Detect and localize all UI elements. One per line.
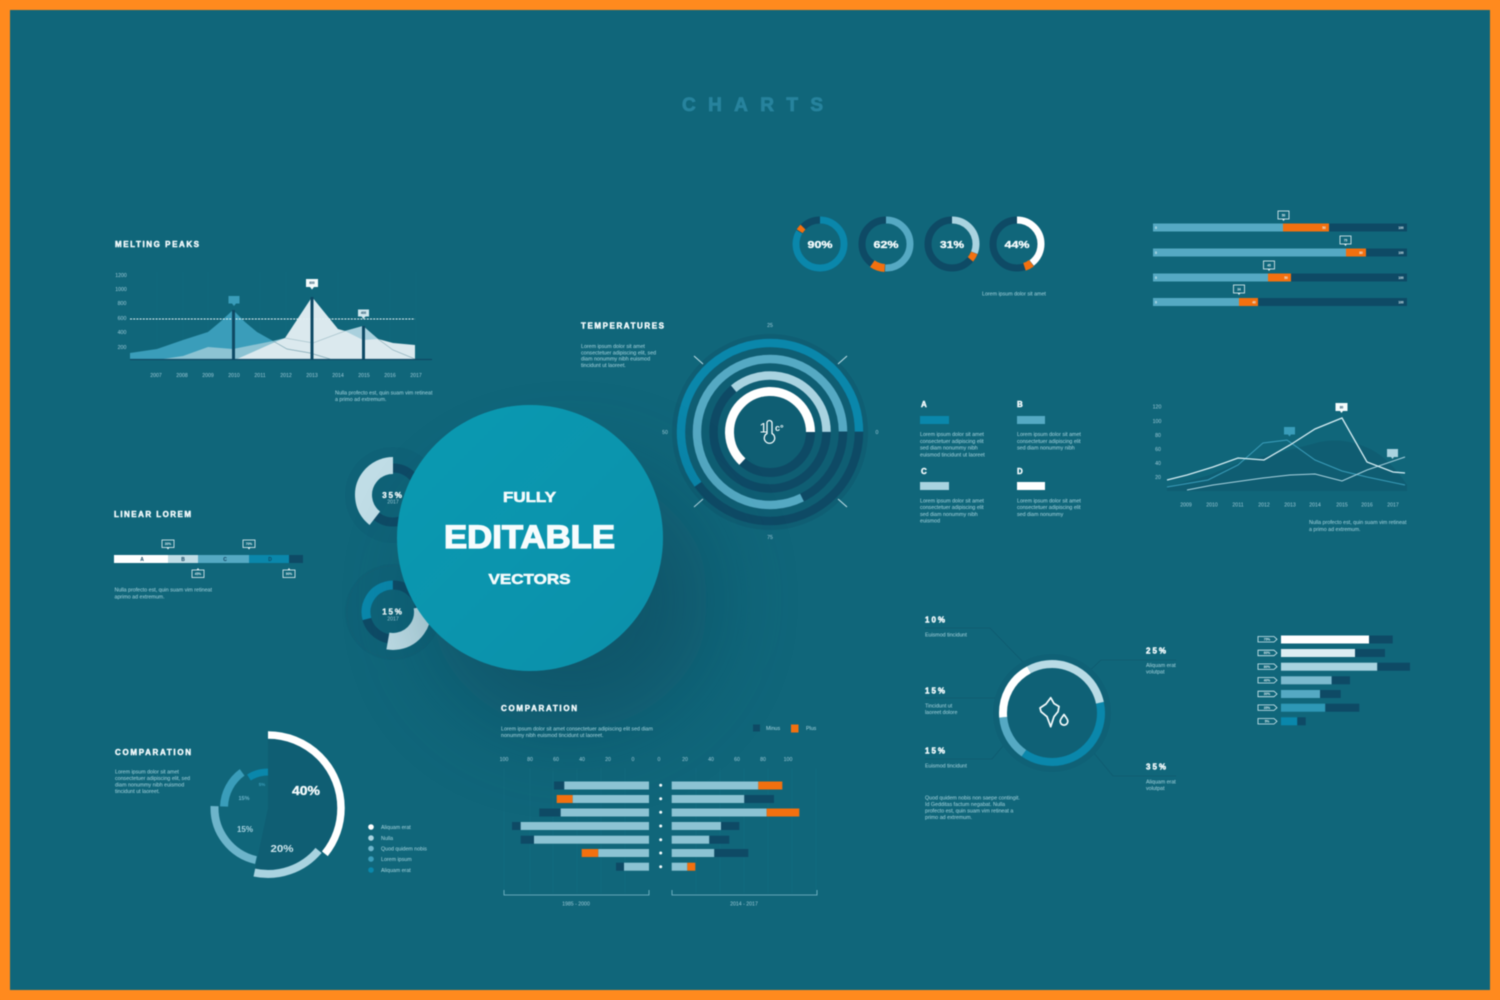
axis labels: 2007 [150,373,162,379]
line chart axes [1153,404,1399,508]
bar row 1: 100 [1398,226,1404,230]
bar row 4: 34 [1237,288,1241,292]
icon: thermometer: c° [775,423,784,433]
donut 62% [861,219,911,269]
axis values: 60 [553,757,559,763]
ring text: profecto est, quin suam vim retineat a [925,808,1013,814]
ring labels: 25% [1146,646,1166,656]
ring text: primo ad extremum. [925,815,972,821]
temperatures text: tincidunt ut laoreet. [581,363,626,369]
gauge labels: 0 [876,430,879,436]
axis labels: 2012 [280,373,292,379]
axis values: 100 [500,757,508,763]
minus plus legend [753,724,817,732]
axis values: 20 [605,757,611,763]
pie labels: 15% [238,796,250,802]
minus plus legend: Minus [766,726,780,732]
panel: legend A to D [920,400,1081,525]
gauge labels [662,323,879,541]
pie legend: Aliquam erat [381,868,411,874]
bar row 2: 0 [1155,251,1157,255]
bar row 2: 100 [1398,251,1404,255]
ring labels: laoreet dolore [925,710,957,716]
ring labels: Tincidunt ut [925,704,952,710]
bar row 4: 40 [1252,300,1256,304]
line chart axes: 2017 [1387,502,1399,508]
minus plus legend: Plus [806,726,817,732]
right bars [672,782,799,871]
axis labels: 2009 [202,373,214,379]
line chart axes: 2016 [1361,502,1373,508]
linear text: Nulla profecto est, quin suam vim retineat [114,588,212,594]
legend C [920,467,984,525]
badge text: vectors: VECTORS [488,571,570,588]
area chart [130,272,432,360]
bar tag values: 60% [1264,651,1270,655]
donut: 15 percent: 15% [382,608,404,616]
gauge ticks [694,356,847,507]
axis values [500,757,792,763]
donut: 35 percent: 2017 [387,500,399,506]
donut: 15 percent [345,564,441,660]
axis values: 80 [527,757,533,763]
axis labels: 200 [118,345,126,351]
donut 90%: 90% [808,239,833,251]
pie legend [368,824,427,874]
ring labels: volutpat [1146,786,1165,792]
panel: tagged bars [1258,636,1410,725]
bar row 3: 100 [1398,276,1404,280]
legend C: Lorem ipsum dolor sit amet [920,498,984,504]
legend C: consectetuer adipiscing elit [920,505,984,511]
linear text: aprimo ad extremum. [114,594,165,600]
donut 90% [787,211,853,277]
panel: comparation bars [500,704,817,908]
temperatures text: consectetuer adipiscing elit, sed [581,350,656,356]
line chart axes: 2013 [1284,502,1296,508]
legend D: Lorem ipsum dolor sit amet [1017,498,1081,504]
panel: linear lorem [114,510,303,600]
line chart axes: 120 [1153,404,1161,410]
panel: horizontal progress bars [1153,211,1407,306]
bracket labels: 2014 - 2017 [730,902,758,908]
donut 31% [921,213,983,275]
bar row 3 [1153,261,1407,282]
line series [1167,418,1405,490]
line chart axes: 20 [1155,475,1161,481]
line chart axes: 80 [1155,433,1161,439]
legend B: Lorem ipsum dolor sit amet [1017,432,1081,438]
axis values: 0 [632,757,635,763]
legend A: Lorem ipsum dolor sit amet [920,432,984,438]
heading: linear lorem: LINEAR LOREM [114,510,191,519]
pie sectors [224,764,312,852]
ring labels: 15% [925,746,945,756]
segmented bar: C [223,557,227,563]
donut 44% [983,210,1051,278]
comparation bars text: Lorem ipsum dolor sit amet consectetuer adipiscing elit sed diam [501,726,653,732]
connector lines [925,628,1176,776]
ring chart [984,645,1120,781]
donut: 35 percent [345,447,441,543]
bar tag values: 80% [1264,665,1270,669]
axis labels: 1200 [115,273,127,279]
axis values: 0 [658,757,661,763]
bracket labels: 1985 - 2000 [562,902,590,908]
legend A: euismod tincidunt ut laoreet [920,452,985,458]
heading: temperatures: TEMPERATURES [581,322,665,330]
bar row 3: 0 [1155,276,1157,280]
icon: thermometer: 1 [760,420,768,436]
gauge labels: 75 [767,535,773,541]
axis labels [115,273,422,379]
main circle shadow [430,470,710,730]
panel: four donuts [787,210,1051,298]
axis labels: 2008 [176,373,188,379]
ring labels: volutpat [1146,670,1165,676]
bar tag values: 30% [1264,692,1270,696]
icon: iceberg and drop [1040,698,1068,727]
pie arcs [175,715,361,901]
legend C: euismod [920,519,940,525]
icon: thermometer [760,420,784,443]
legend A: consectetuer adipiscing elit [920,439,984,445]
bar row 1: 0 [1155,226,1157,230]
comparation text: diam nonummy nibh euismod [115,782,184,788]
axis labels: 2011 [254,373,266,379]
panel: comparation pie [115,715,427,901]
pie labels: 40% [292,784,320,798]
bar row 4: 100 [1398,300,1404,304]
value tags [228,279,369,319]
pie legend: Aliquam erat [381,825,411,831]
bar row 1: 50 [1282,214,1285,218]
axis values: 60 [734,757,740,763]
comparation text: tincidunt ut laoreet. [115,789,160,795]
bar row 1 [1153,211,1407,232]
ring labels: 35% [1146,762,1166,772]
badge text: fully: FULLY [503,489,556,506]
panel: melting peaks [115,240,433,403]
axis values: 40 [708,757,714,763]
axis labels: 2016 [384,373,396,379]
ring labels: 15% [925,686,945,696]
ring labels: Euismod tincidunt [925,764,967,770]
axis labels: 1000 [115,287,127,293]
bar tags: 70% [246,542,252,546]
line chart caption: a primo ad extremum. [1309,527,1361,533]
donut: 35 percent: 35% [382,491,404,500]
axis values: 100 [784,757,792,763]
axis labels: 2017 [410,373,422,379]
axis values: 80 [760,757,766,763]
ring text: Id Gedditas factum negabat. Nulla [925,802,1005,808]
bar row 4 [1153,285,1407,306]
legend A [920,400,985,458]
ring labels [925,616,1176,792]
legend D: consectetuer adipiscing elit [1017,505,1081,511]
donut 31%: 31% [940,239,965,251]
caption: Nulla profecto est, quin suam vim retineat [335,390,432,396]
bar tags: 45% [195,572,201,576]
axis labels: 2014 [332,373,344,379]
bar row 3: 50 [1284,276,1288,280]
legend B [1017,400,1081,452]
comparation text: consectetuer adipiscing elit, sed [115,776,190,782]
legend B: B [1017,400,1023,409]
segmented bar: B [181,557,185,563]
segmented bar [114,555,303,563]
bar tag values: 40% [1264,678,1270,682]
bar row 2 [1153,236,1407,256]
ring labels: Aliquam erat [1146,663,1176,669]
bar tags: 90% [286,572,292,576]
axis labels: 800 [118,301,126,307]
legend D: D [1017,467,1023,476]
donut 62%: 62% [874,239,899,251]
axis values: 20 [682,757,688,763]
left bars [512,782,649,871]
pie labels: 5% [259,782,265,787]
donut 44%: 44% [1004,239,1030,251]
temperatures text: Lorem ipsum dolor sit amet [581,344,645,350]
ring labels: Euismod tincidunt [925,632,967,638]
bar row 2: 80 [1359,251,1363,255]
badge text: editable: EDITABLE [444,519,615,555]
gauge labels: 25 [767,323,773,329]
bar row 3: 45 [1267,264,1271,268]
line chart axes: 2010 [1206,502,1218,508]
ring text: Quod quidem nobis non saepe contingit. [925,796,1020,802]
donut: 15 percent: 2017 [387,616,399,622]
legend A: sed diam nonummy nibh [920,446,978,452]
heading: comparation bars: COMPARATION [501,704,577,713]
segmented bar: D [268,557,272,563]
legend B: consectetuer adipiscing elit [1017,439,1081,445]
panel: temperatures [581,308,894,556]
bracket labels [562,902,758,908]
line chart axes: 2014 [1309,502,1321,508]
axis labels: 2010 [228,373,240,379]
bar tag values: 75% [1264,638,1270,642]
axis values: 40 [579,757,585,763]
caption: a primo ad extremum. [335,397,387,403]
bars [1281,636,1410,725]
shaded area [1167,441,1407,491]
bar tags: 30% [165,542,171,546]
pie labels [237,782,320,855]
radial temperature gauge [646,308,894,556]
bar tags [162,540,295,578]
comparation text: Lorem ipsum dolor sit amet [115,770,179,776]
panel: water ring [925,616,1176,821]
value tags: 400 [361,311,366,315]
ring labels: 10% [925,616,945,624]
axis labels: 400 [118,330,126,336]
legend C: sed diam nonummy nibh [920,512,978,518]
axis labels: 2013 [306,373,318,379]
axis labels: 2015 [358,373,370,379]
heading: comparation: COMPARATION [115,748,191,757]
line chart caption: Nulla profecto est, quin suam vim retineat [1309,520,1406,526]
bar row 1: 50 [1322,226,1326,230]
line chart axes: 60 [1155,447,1161,453]
axis labels: 600 [118,316,126,322]
bar row 4: 0 [1155,300,1157,304]
legend D: sed diam nonummy [1017,512,1064,518]
temperatures text: diam nonummy nibh euismod [581,357,650,363]
ring labels: Aliquam erat [1146,780,1176,786]
legend D [1017,467,1081,518]
donut caption: Lorem ipsum dolor sit amet [982,292,1046,298]
line chart axes: 2011 [1232,502,1244,508]
main badge circle [397,405,663,671]
pie legend: Quod quidem nobis [381,846,427,852]
comparation bars text: nonummy nibh euismod tincidunt ut laoreet. [501,733,603,739]
legend B: sed diam nonummy nibh [1017,446,1075,452]
line chart axes: 40 [1155,461,1161,467]
value tags: 600 [309,281,315,285]
heading: melting peaks: MELTING PEAKS [115,240,200,249]
brackets [504,890,817,895]
bar tag values: 35% [1264,706,1270,710]
bar row 2: 75 [1344,238,1347,242]
pie legend: Nulla [381,836,393,842]
line chart axes: 2015 [1336,502,1348,508]
gauge labels: 50 [662,430,668,436]
line chart tags [1284,403,1398,459]
segmented bar: A [140,557,144,563]
bar tag values [1264,638,1270,724]
line chart axes: 2012 [1258,502,1270,508]
bar tag values: 5% [1265,720,1269,724]
pie labels: 20% [270,844,294,855]
legend C: C [921,467,927,476]
title: CHARTS [682,95,823,116]
line chart tags: 80 [1340,405,1343,409]
center dots [659,784,662,868]
pie legend: Lorem ipsum [381,857,412,863]
legend A: A [921,400,927,409]
bar tags [1258,636,1277,724]
pie labels: 15% [237,825,253,834]
line chart axes: 100 [1153,419,1161,425]
line chart axes: 2009 [1180,502,1192,508]
panel: line chart [1153,403,1407,533]
